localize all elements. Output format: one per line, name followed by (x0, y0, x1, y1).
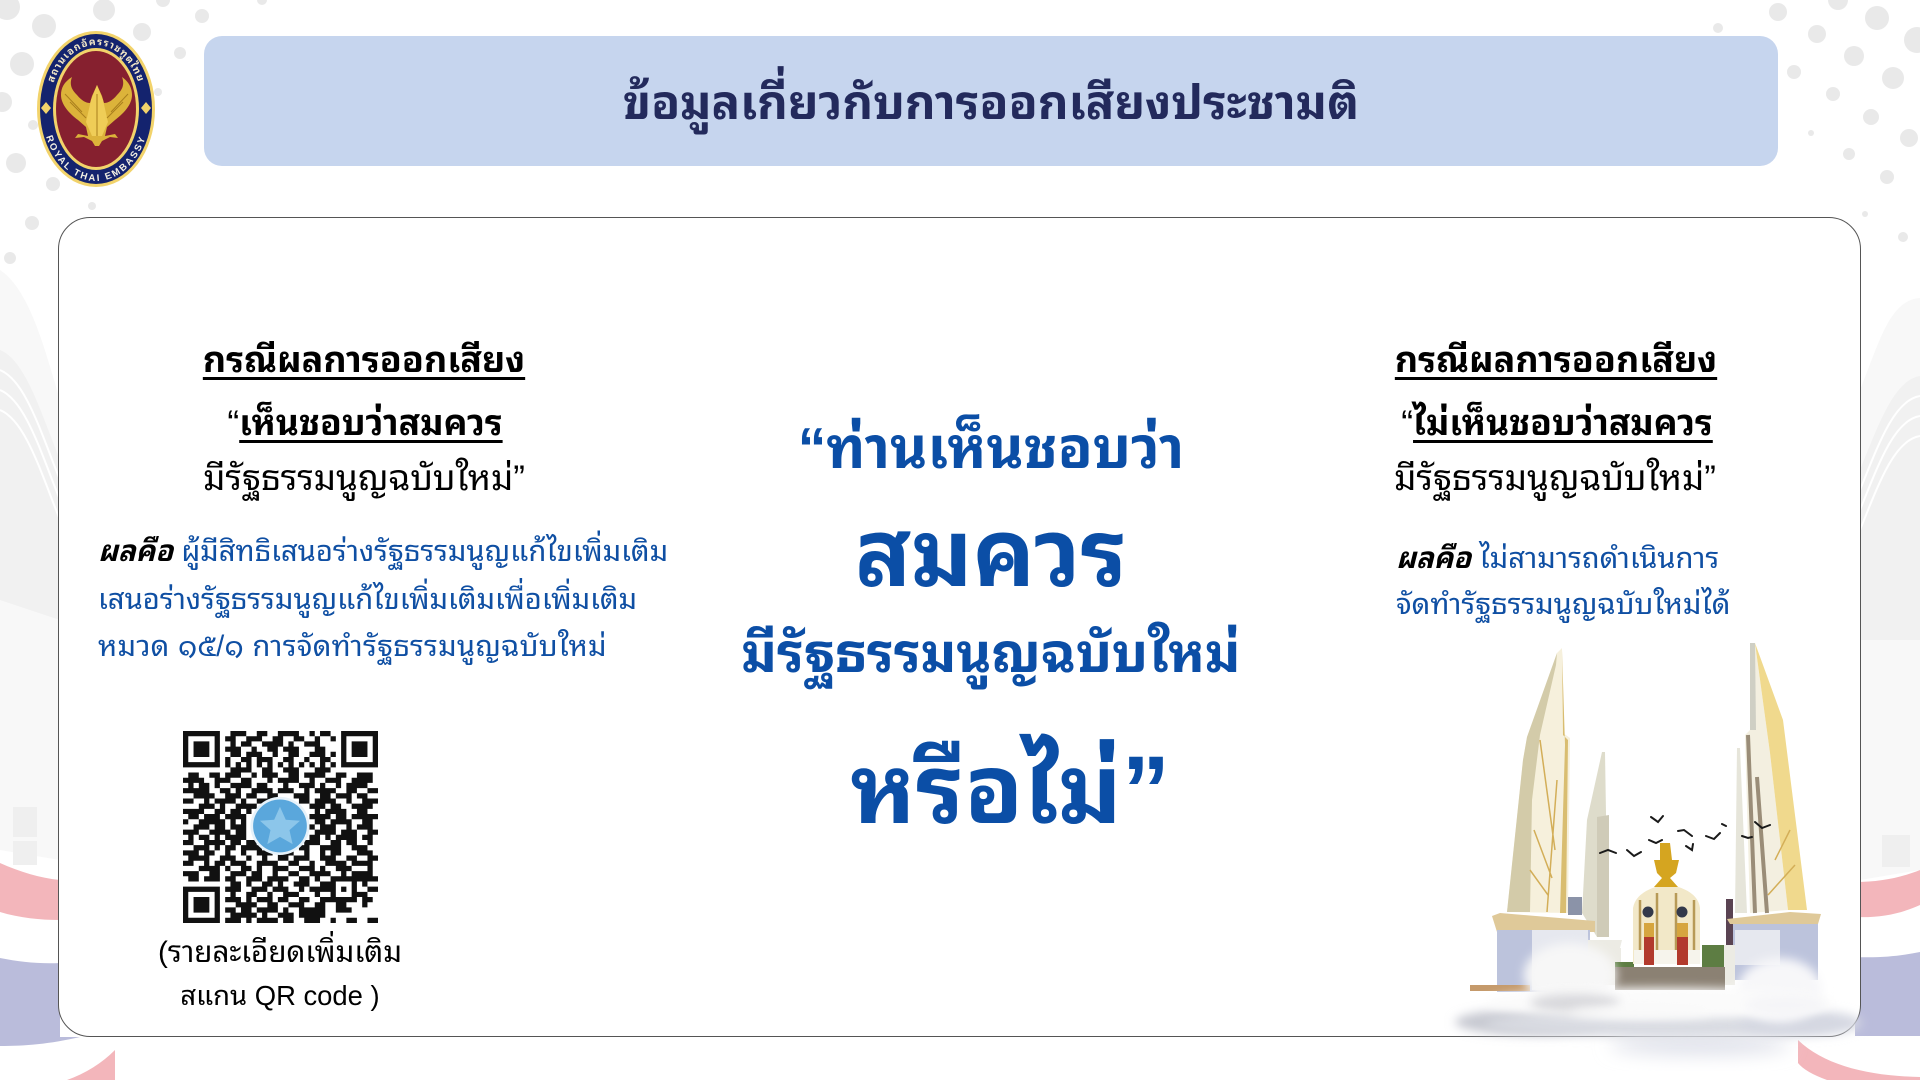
clouds (1455, 943, 1862, 1055)
icon: royal thai embassy seal (37, 31, 155, 187)
central finial (1654, 843, 1679, 887)
panel: main white card (58, 217, 1861, 1037)
right body text: ผลคือ ไม่สามารถดำเนินการ (1396, 543, 1719, 575)
icon: royal thai embassy seal: สถานเอกอัครราชทูตไทย (48, 38, 144, 82)
QR caption: สแกน QR code ) (180, 980, 380, 1011)
left wing (1507, 648, 1570, 913)
right body text (1396, 540, 1730, 624)
left body text: ผลคือ ผู้มีสิทธิเสนอร่างรัฐธรรมนูญแก้ไขเพิ่มเติม (98, 536, 668, 568)
right heading: กรณีผลการออกเสียง (1395, 340, 1717, 380)
central dome (1615, 945, 1724, 982)
line 1: “ท่านเห็นชอบว่า (798, 417, 1184, 481)
illustration: democracy monument (1452, 643, 1862, 1061)
birds (1600, 816, 1770, 856)
QR caption (158, 931, 402, 1011)
line 3: มีรัฐธรรมนูญฉบับใหม่ (742, 624, 1240, 684)
QR caption: (รายละเอียดเพิ่มเติม (158, 936, 402, 969)
right small wing (1735, 748, 1747, 913)
title: ข้อมูลเกี่ยวกับการออกเสียงประชามติ (623, 77, 1359, 130)
icon: royal thai embassy seal: ROYAL THAI EMBASSY (46, 135, 144, 181)
right wing (1745, 643, 1788, 913)
line 2: สมควร (855, 502, 1127, 606)
right subheading second line: มีรัฐธรรมนูญฉบับใหม่” (1394, 459, 1716, 498)
left base (1492, 913, 1595, 932)
right subheading: “ไม่เห็นชอบว่าสมควร (1401, 403, 1713, 443)
QR code (183, 731, 378, 923)
central question (742, 414, 1240, 844)
header bar (204, 36, 1778, 166)
left body text (98, 530, 668, 666)
left heading: กรณีผลการออกเสียง (203, 340, 525, 380)
right base (1727, 912, 1821, 924)
right body text: จัดทำรัฐธรรมนูญฉบับใหม่ได้ (1396, 589, 1730, 621)
left body text: หมวด ๑๕/๑ การจัดทำรัฐธรรมนูญฉบับใหม่ (98, 631, 607, 663)
left subheading: “เห็นชอบว่าสมควร (227, 403, 503, 443)
left body text: เสนอร่างรัฐธรรมนูญแก้ไขเพิ่มเติมเพื่อเพิ่มเติม (98, 584, 637, 616)
back buildings (1568, 897, 1582, 915)
line 4: หรือไม่” (850, 737, 1170, 844)
left small wing (1582, 752, 1608, 937)
left subheading second line: มีรัฐธรรมนูญฉบับใหม่” (203, 459, 525, 498)
